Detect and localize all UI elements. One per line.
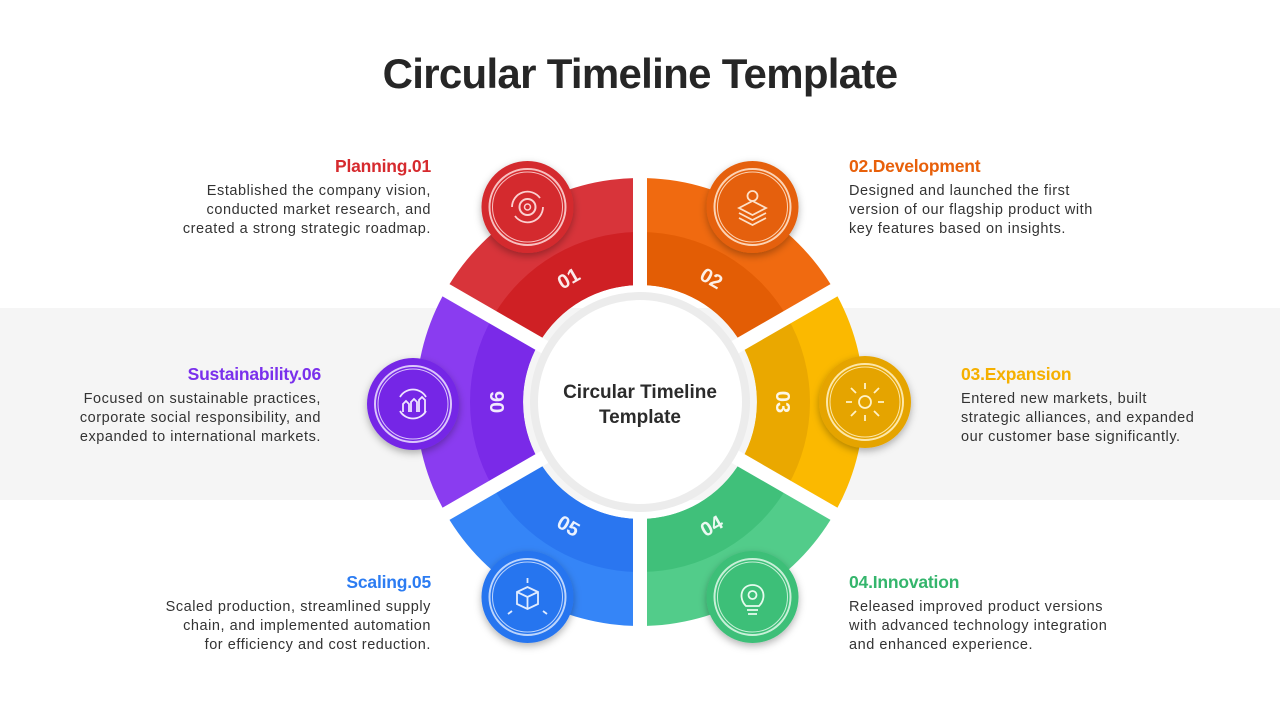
segment 04	[640, 460, 834, 626]
text block: expansion: our customer base significantly.	[961, 429, 1181, 445]
icon: sustainability 06	[367, 358, 459, 450]
center circle: Circular Timeline	[563, 382, 717, 403]
text block: sustainability: corporate social responsibility, and	[80, 410, 321, 426]
title: Circular Timeline Template	[383, 50, 897, 97]
text block: planning: conducted market research, and	[207, 202, 431, 218]
text block: planning: Established the company vision,	[207, 183, 431, 199]
text block: expansion: Entered new markets, built	[961, 391, 1147, 407]
text block: development: 02.Development	[849, 156, 980, 176]
icon: expansion 03	[819, 356, 911, 448]
text block: development: version of our flagship product with	[849, 202, 1093, 218]
text block: development: Designed and launched the first	[849, 183, 1070, 199]
text block: scaling	[166, 572, 431, 653]
segment numbers: 04	[697, 511, 728, 542]
segment numbers: 02	[696, 264, 726, 294]
segment numbers: 03	[771, 391, 793, 413]
text block: scaling: for efficiency and cost reduction.	[205, 637, 431, 653]
text block: development: key features based on insights.	[849, 221, 1066, 237]
segment 01	[446, 178, 640, 344]
text block: planning	[183, 156, 431, 237]
text block: sustainability: expanded to international markets.	[80, 429, 321, 445]
center circle	[530, 292, 750, 512]
segment numbers	[487, 264, 793, 542]
icon: bulb 04	[706, 551, 798, 643]
text block: expansion: strategic alliances, and expanded	[961, 410, 1194, 426]
text block: sustainability: Focused on sustainable practices,	[84, 391, 321, 407]
text block: expansion: 03.Expansion	[961, 364, 1071, 384]
text block: innovation: 04.Innovation	[849, 572, 959, 592]
text block: innovation: with advanced technology integration	[849, 618, 1107, 634]
segment 05	[446, 460, 640, 626]
icon: layers gear 02	[706, 161, 798, 253]
text block: innovation: Released improved product versions	[849, 599, 1103, 615]
center circle: Template	[599, 407, 681, 428]
text block: innovation: and enhanced experience.	[849, 637, 1033, 653]
icon: gear cycle 01	[482, 161, 574, 253]
segment numbers: 01	[554, 264, 584, 294]
segment 06	[416, 290, 539, 514]
segment 02	[640, 178, 834, 344]
text block: planning: created a strong strategic roadmap.	[183, 221, 431, 237]
text block: scaling: Scaling.05	[346, 572, 431, 592]
text block: sustainability	[80, 364, 321, 445]
text block: scaling: chain, and implemented automation	[183, 618, 431, 634]
text block: development	[849, 156, 1093, 237]
text block: innovation	[849, 572, 1107, 653]
icon: box 05	[482, 551, 574, 643]
text block: scaling: Scaled production, streamlined supply	[166, 599, 431, 615]
text block: planning: Planning.01	[335, 156, 431, 176]
segment numbers: 06	[487, 391, 509, 413]
text block: expansion	[961, 364, 1194, 445]
segment 03	[741, 290, 864, 514]
segment numbers: 05	[553, 512, 583, 542]
text block: sustainability: Sustainability.06	[188, 364, 321, 384]
